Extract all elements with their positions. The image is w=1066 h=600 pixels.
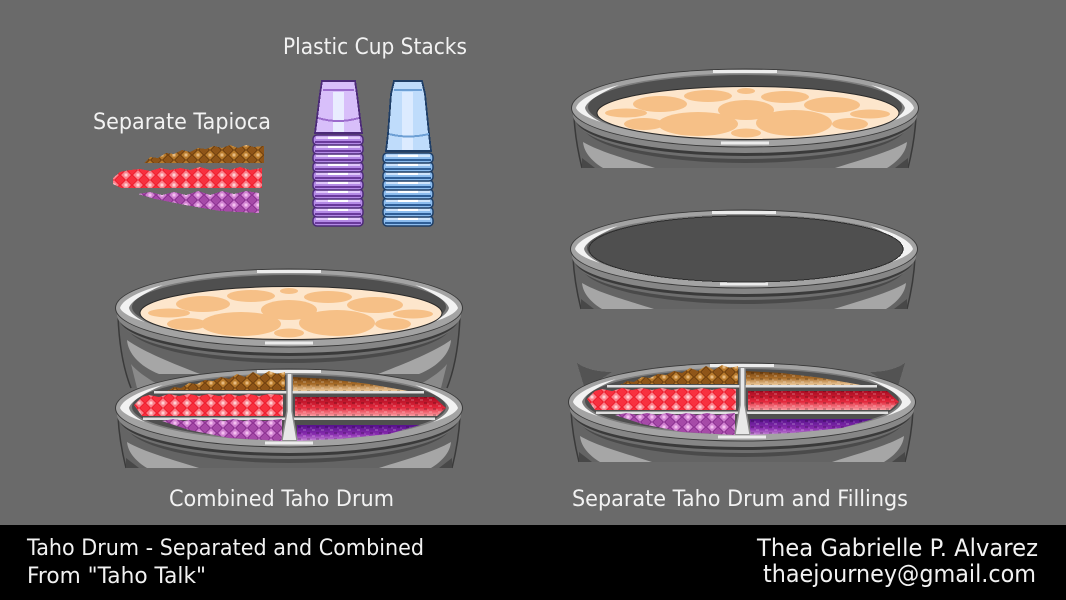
separate fillings drum [568, 362, 916, 462]
caption: separate taho drum and fillings: Separate Taho Drum and Fillings [572, 487, 908, 512]
caption: combined taho drum: Combined Taho Drum [169, 487, 394, 512]
separate tapioca fillings [113, 145, 264, 213]
combined taho drum [115, 268, 463, 468]
heading: separate tapioca: Separate Tapioca [93, 110, 271, 135]
footer bar [0, 525, 1066, 600]
lower drum with fillings [115, 368, 463, 468]
footer title: From "Taho Talk" [27, 564, 206, 589]
blue cup stack [383, 81, 433, 226]
footer credit: Thea Gabrielle P. Alvarez [756, 534, 1038, 562]
heading: plastic cup stacks: Plastic Cup Stacks [283, 35, 467, 60]
separate drum with taho [571, 68, 919, 168]
upper drum with taho [115, 268, 463, 388]
footer credit: thaejourney@gmail.com [763, 560, 1036, 588]
footer credit [756, 534, 1038, 588]
purple cup stack [313, 81, 363, 226]
footer title: Taho Drum - Separated and Combined [26, 536, 424, 561]
footer title [26, 536, 424, 589]
empty drum [570, 210, 918, 309]
